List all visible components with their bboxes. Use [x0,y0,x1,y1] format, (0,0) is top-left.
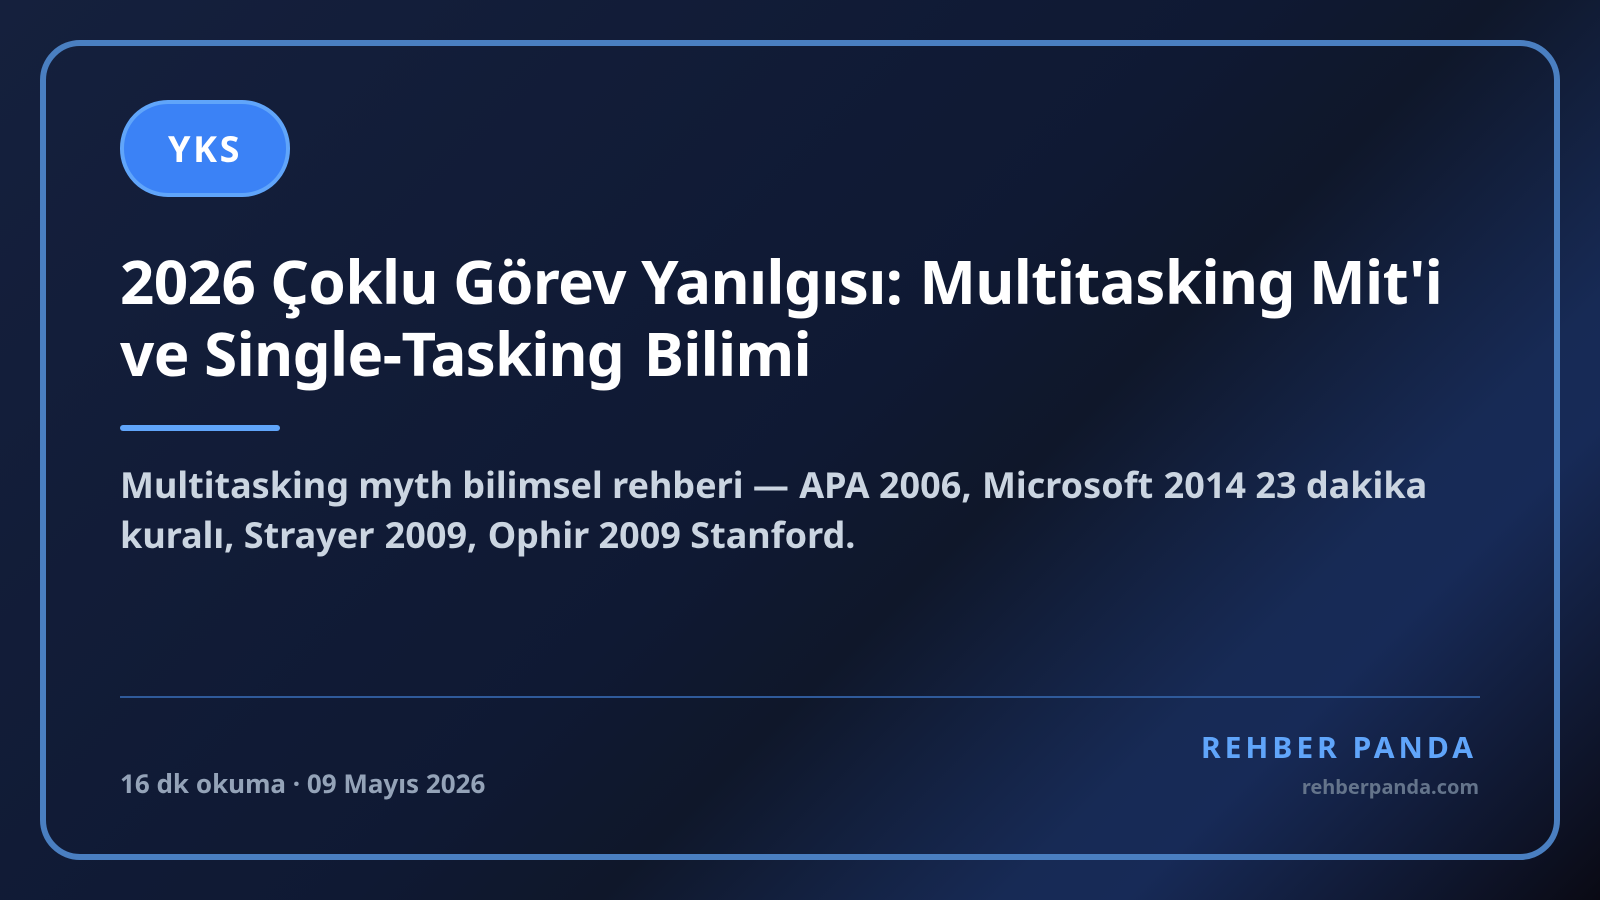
subtitle: Multitasking myth bilimsel rehberi — APA 2006, Microsoft 2014 23 dakika [120,460,1427,509]
accent rule [120,425,280,431]
footer divider [120,696,1480,698]
subtitle: kuralı, Strayer 2009, Ophir 2009 Stanford. [120,510,855,559]
reading time and date: 16 dk okuma · 09 Mayıs 2026 [120,765,485,801]
subtitle [120,460,1427,559]
badge: YKS [120,100,290,197]
brand name: REHBER PANDA [1201,726,1477,767]
title: 2026 Çoklu Görev Yanılgısı: Multitasking Mit'i [120,240,1442,322]
website: rehberpanda.com [1302,773,1479,800]
title: ve Single-Tasking Bilimi [120,312,811,394]
badge: YKS: YKS [168,124,242,173]
title [120,240,1442,394]
